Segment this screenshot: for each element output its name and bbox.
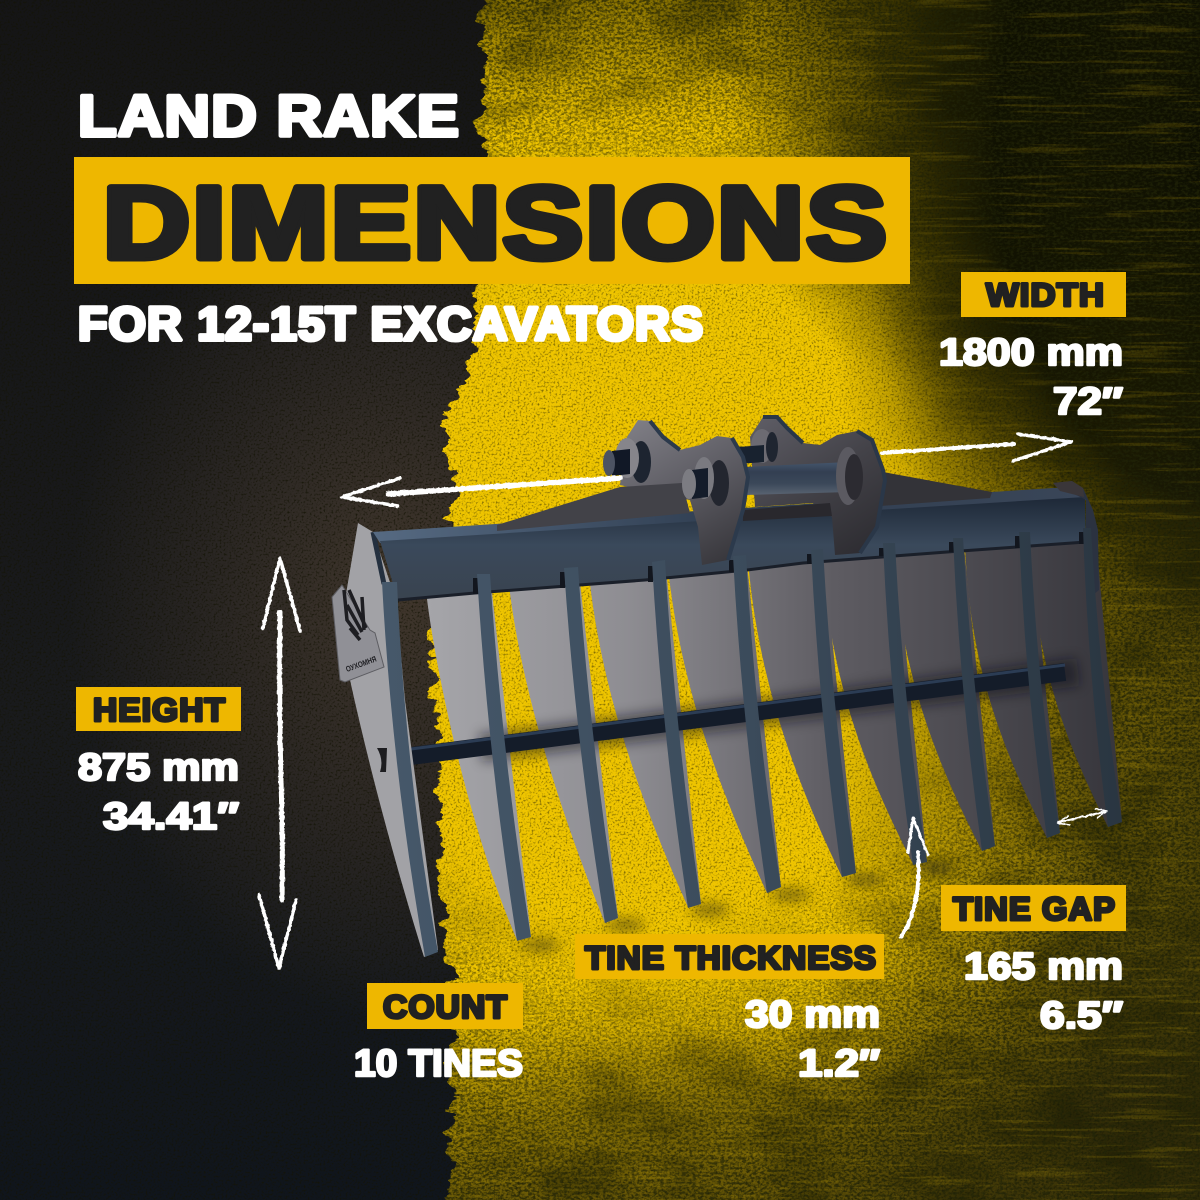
callout: count: COUNT [383, 989, 508, 1025]
strip notches [473, 532, 1084, 594]
land rake attachment [332, 417, 1122, 957]
left mounting lug [620, 420, 748, 565]
callout: width: 1800 mm [939, 332, 1123, 374]
title banner: DIMENSIONS [103, 166, 889, 280]
callout: tine gap: TINE GAP [953, 891, 1116, 927]
tine strips [382, 528, 1122, 957]
callout: tine gap: 165 mm [964, 946, 1123, 988]
callout: height: 875 mm [78, 747, 239, 789]
logo plate: ОУХОМНЯ [345, 654, 378, 674]
title line: subtitle: FOR 12-15T EXCAVATORS [78, 297, 704, 350]
left gusset [497, 483, 690, 531]
title [74, 84, 910, 350]
callout: tine thickness: 30 mm [745, 994, 880, 1036]
tine shadows on ground [520, 861, 955, 952]
callout: width: 72″ [1053, 381, 1123, 423]
arrow: height [259, 558, 300, 968]
callout: tine thickness [575, 934, 884, 1085]
callout: tine thickness: TINE THICKNESS [585, 940, 877, 976]
front pin stub on left lug [682, 457, 729, 506]
callout: height: HEIGHT [93, 692, 226, 728]
callout: width: WIDTH [986, 277, 1105, 313]
arrow: tine thickness [901, 818, 928, 937]
right end plate [1053, 481, 1099, 595]
front hinge pin [745, 447, 863, 505]
callout: tine thickness: 1.2″ [798, 1043, 880, 1085]
left end plate [345, 523, 438, 957]
back hinge pin [738, 432, 778, 464]
tine blades [426, 528, 1122, 940]
cross rod [411, 665, 1078, 756]
callout: height [76, 687, 241, 838]
logo plate [332, 585, 384, 682]
callout: tine gap [941, 885, 1126, 1037]
title line: land rake: LAND RAKE [78, 84, 460, 149]
callout: height: 34.41″ [103, 796, 239, 838]
callout: width [939, 272, 1126, 423]
right gusset [880, 472, 992, 506]
back pin stub on left lug [603, 438, 651, 483]
arrow: tine gap [1057, 809, 1107, 825]
callout: count: 10 TINES [354, 1043, 523, 1085]
callout: count [354, 983, 523, 1085]
main beam [373, 488, 1087, 600]
right mounting lug [743, 417, 885, 555]
callout: tine gap: 6.5″ [1040, 995, 1123, 1037]
yellow paint stroke [426, 0, 1200, 1200]
arrow: width [342, 434, 1071, 506]
